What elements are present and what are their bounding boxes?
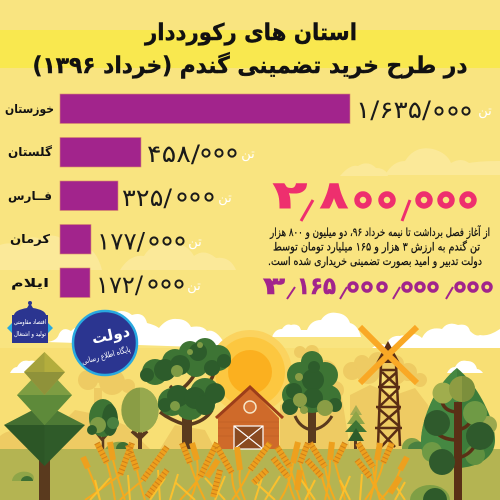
bar row: Golestan: ۴۵۸/ xyxy=(147,140,201,168)
bar row: Golestan xyxy=(8,138,255,168)
logo: economy badge: تولید و اشتغال xyxy=(14,330,46,338)
headline number: 2,800,000 tons: ۸ xyxy=(320,173,348,217)
headline number: 2,800,000 tons: ۰۰ ۰۰۰ xyxy=(362,198,468,204)
value number: 3,165 billion tomans: ۳ xyxy=(263,272,286,300)
bar row: Fars: ۳۲۵/ xyxy=(122,184,173,212)
bar row: Kerman: ۰۰۰ xyxy=(153,239,181,245)
bar row: Khuzestan: خوزستان xyxy=(5,102,54,117)
bushes xyxy=(12,438,450,500)
description paragraph xyxy=(268,225,490,269)
small round tree xyxy=(87,399,119,449)
bar row: Kerman xyxy=(10,224,202,256)
description paragraph: تن گندم به ارزش ۳ هزار و ۱۶۵ میلیارد تومان توسط xyxy=(273,240,480,254)
logo: government circle: پایگاه اطلاع رسانی xyxy=(81,344,131,366)
logo: government circle xyxy=(73,311,137,375)
large branching tree xyxy=(140,338,231,449)
wheat ears xyxy=(83,442,407,497)
bar row: Ilam: تن xyxy=(187,279,201,294)
bar row: Kerman: کرمان xyxy=(10,232,50,246)
pale background clouds xyxy=(0,148,500,270)
bar row: Khuzestan: تن xyxy=(478,104,492,119)
red barn xyxy=(216,387,283,449)
sun xyxy=(208,330,292,414)
logo: economy badge xyxy=(7,301,53,343)
title band xyxy=(0,30,500,68)
white clouds xyxy=(10,311,500,373)
bar row: Fars: ۰۰۰ xyxy=(181,195,209,201)
bar chart: provinces xyxy=(5,94,492,299)
headline number: 2,800,000 tons: ۲ xyxy=(273,173,307,217)
lower sky band xyxy=(0,348,500,450)
value number: 3,165 billion tomans: ۱۶۵ xyxy=(297,272,336,300)
bar row: Ilam: ۰۰۰ xyxy=(152,282,180,288)
logo: government circle: دولت xyxy=(90,322,132,348)
title: در طرح خرید تضمینی گندم (خرداد ۱۳۹۶) xyxy=(32,52,468,79)
bar row: Golestan: تن xyxy=(241,147,255,162)
title xyxy=(32,20,468,79)
bar row: Golestan: گلستان xyxy=(8,145,52,159)
bar row: Kerman: تن xyxy=(188,235,202,250)
ground xyxy=(0,449,500,500)
value number: 3,165 billion tomans xyxy=(263,272,491,300)
bar row: Kerman: ۱۷۷/ xyxy=(97,228,146,256)
windmill xyxy=(360,327,417,447)
geometric pine tree xyxy=(4,352,85,500)
olive oval tree xyxy=(121,388,159,449)
value number: 3,165 billion tomans: ۰۰۰ ۰۰۰ ۰۰۰ xyxy=(353,285,487,291)
bar row: Khuzestan: ۰۰۰ xyxy=(438,109,468,115)
bar row: Khuzestan xyxy=(5,94,492,124)
bar row: Fars xyxy=(8,181,232,212)
wheat stems xyxy=(85,460,405,500)
bar row: Khuzestan: ۱/۶۳۵/ xyxy=(356,96,432,124)
logo: economy badge: اقتصاد مقاومتی xyxy=(14,318,46,326)
mid tree xyxy=(282,351,342,443)
bar row: Golestan: ۰۰۰ xyxy=(205,151,233,157)
wheat field xyxy=(83,442,407,500)
small fir tree xyxy=(345,405,367,449)
bar row: Fars: فــارس xyxy=(8,189,52,203)
right tree xyxy=(421,368,497,500)
bar row: Fars: تن xyxy=(218,191,232,206)
bar row: Ilam xyxy=(11,268,201,299)
background tree silhouettes xyxy=(0,345,435,449)
headline number: 2,800,000 tons xyxy=(273,173,474,221)
bar row: Ilam: ۱۷۲/ xyxy=(96,271,144,299)
title: استان های رکورددار xyxy=(144,20,357,46)
bar row: Ilam: ایلام xyxy=(11,276,49,291)
